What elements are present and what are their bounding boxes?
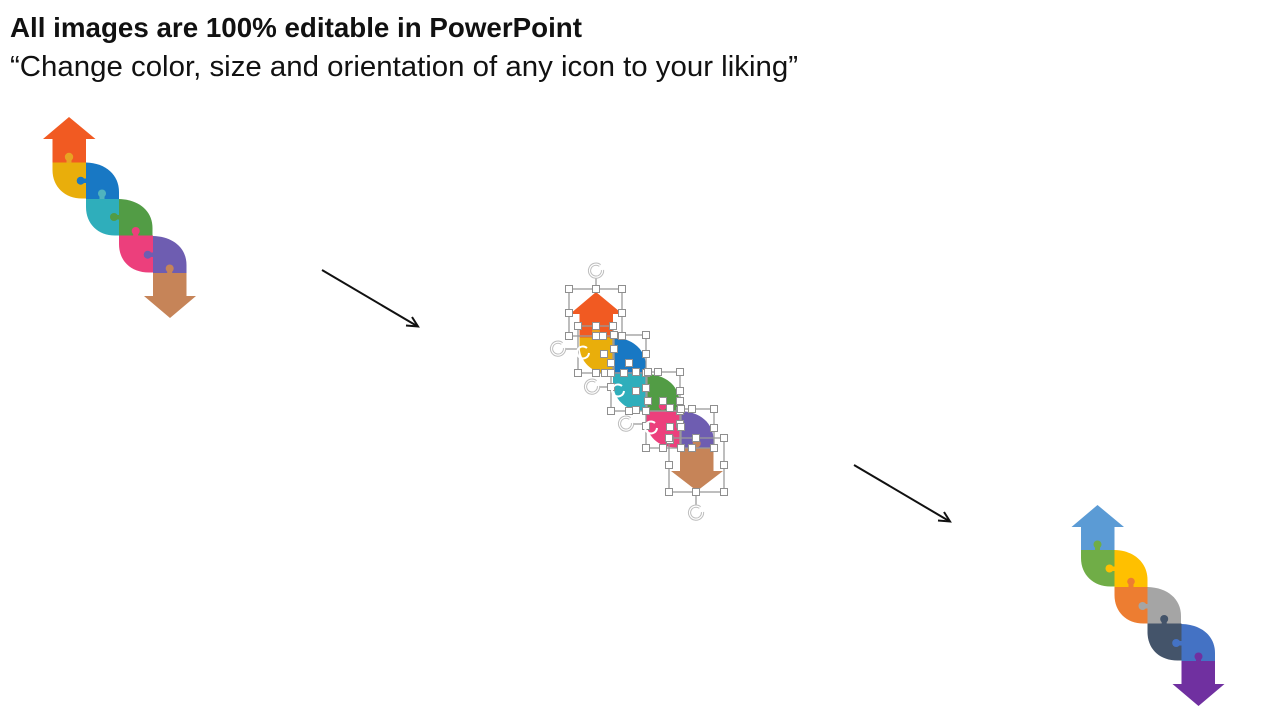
arrow: second transition bbox=[854, 465, 950, 522]
rotation handles bbox=[552, 264, 703, 519]
puzzle arrow: original colours bbox=[43, 117, 196, 318]
puzzle arrow: selected with editing handles bbox=[552, 264, 728, 519]
puzzle arrow: recoloured bbox=[1072, 505, 1224, 706]
arrow: first transition bbox=[322, 270, 418, 326]
resize handles bbox=[566, 286, 728, 496]
puzzle pieces bbox=[570, 292, 723, 491]
subtitle: “Change color, size and orientation of any icon to your liking” bbox=[10, 51, 798, 83]
selection boxes bbox=[564, 276, 724, 507]
title: All images are 100% editable in PowerPoint bbox=[10, 12, 582, 43]
